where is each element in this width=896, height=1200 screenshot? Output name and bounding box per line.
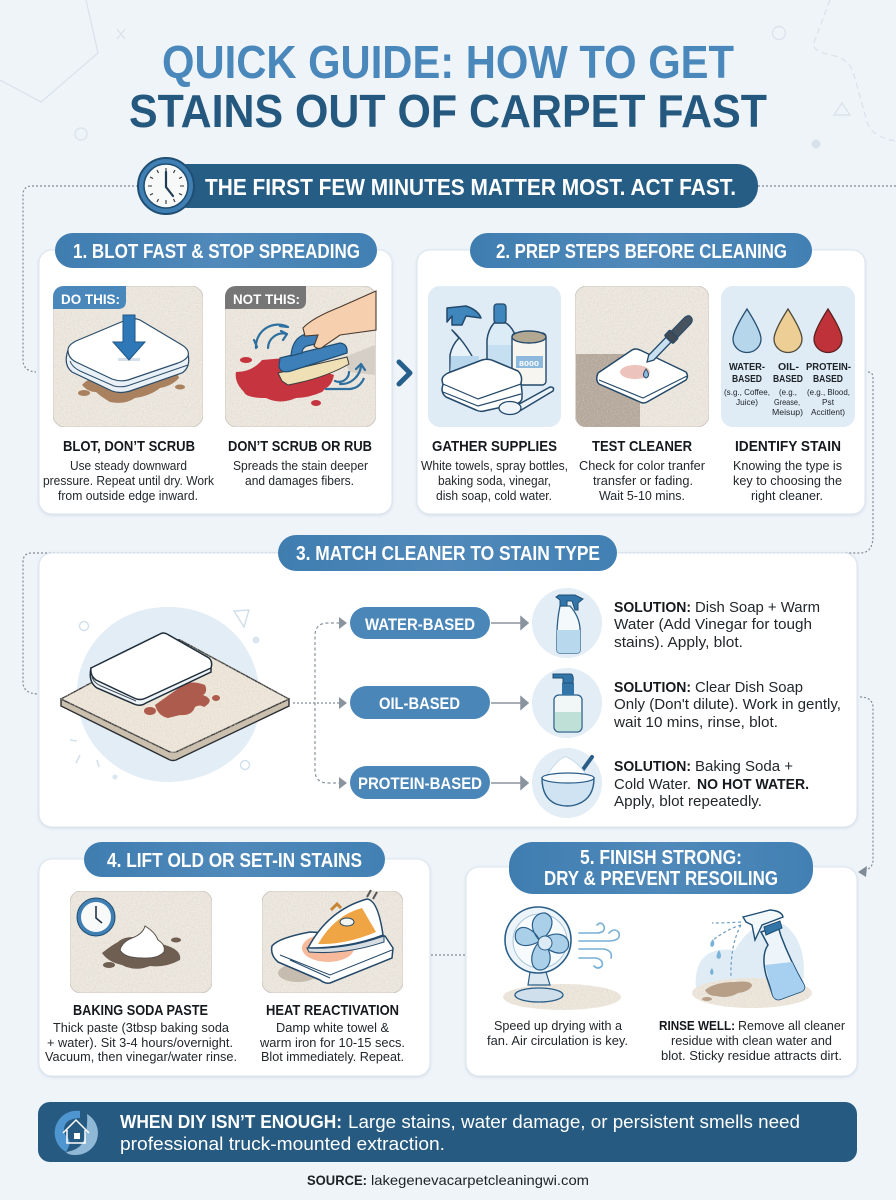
caption: gather supplies: dish soap, cold water. xyxy=(436,488,552,503)
icon: spray bottle xyxy=(532,588,602,658)
caption: heat reactivation: Blot immediately. Repeat. xyxy=(261,1049,404,1064)
illustration: iron heat xyxy=(262,890,403,993)
icon: house in swirl xyxy=(55,1111,98,1155)
solution: protein based xyxy=(614,758,809,810)
heading: step 5: 5. FINISH STRONG: xyxy=(580,847,742,869)
caption: test cleaner: TEST CLEANER xyxy=(592,438,692,455)
solution: oil based: Clear Dish Soap xyxy=(695,679,803,696)
illustration: test cleaner xyxy=(575,286,709,427)
solution: water based: Water (Add Vinegar for tough xyxy=(614,616,812,633)
caption: don't scrub or rub xyxy=(228,438,372,488)
icon: clock xyxy=(138,158,194,214)
heading: step 2 xyxy=(470,233,812,268)
caption: rinse well: RINSE WELL: xyxy=(659,1018,735,1033)
caption: test cleaner: Check for color tranfer xyxy=(579,458,706,473)
label: water based: Juice) xyxy=(736,397,758,407)
illustration: rinse spray bottle xyxy=(692,910,812,1008)
label: oil based xyxy=(772,361,803,417)
caption: gather supplies: baking soda, vinegar, xyxy=(438,473,551,488)
caption: gather supplies: GATHER SUPPLIES xyxy=(432,438,557,455)
heading: step 1 xyxy=(55,233,377,268)
dotted connector: step 3 to step 5 xyxy=(858,697,873,877)
label: protein based: Accitlent) xyxy=(811,407,845,417)
illustration: supplies xyxy=(428,286,561,427)
caption: don't scrub or rub: Spreads the stain deeper xyxy=(233,458,369,473)
label: oil based: OIL- xyxy=(778,361,799,373)
decorative background shapes xyxy=(0,0,896,148)
dotted connector: banner to section 1 xyxy=(23,186,138,372)
illustration: do this, towel blotting stain xyxy=(53,286,203,427)
arrow: chevron between steps 1 and 2 xyxy=(399,362,410,384)
illustration: fan xyxy=(503,907,621,1010)
callout text xyxy=(120,1112,800,1154)
caption: baking soda paste: BAKING SODA PASTE xyxy=(73,1002,208,1019)
callout text: Large stains, water damage, or persistent smells need xyxy=(348,1112,800,1132)
label: protein based: BASED xyxy=(813,373,843,385)
callout text: professional truck-mounted extraction. xyxy=(120,1134,445,1154)
icon: bowl of baking soda xyxy=(532,748,602,818)
solution: oil based xyxy=(613,679,841,731)
panel: step 2 prep xyxy=(417,233,865,514)
caption: gather supplies xyxy=(421,438,568,503)
dotted connector: step 4 to step 5 xyxy=(431,954,466,956)
solution: oil based: Only (Don't dilute). Work in gently, xyxy=(614,696,841,713)
caption: rinse well: blot. Sticky residue attracts dirt. xyxy=(661,1048,842,1063)
connector: carpet to stain types xyxy=(293,617,347,789)
caption: don't scrub or rub: and damages fibers. xyxy=(245,473,354,488)
caption: identify stain: right cleaner. xyxy=(751,488,823,503)
heading: step 1: 1. BLOT FAST & STOP SPREADING xyxy=(73,241,360,263)
caption: rinse well xyxy=(659,1018,846,1063)
caption: blot, don't scrub: Use steady downward xyxy=(70,458,187,473)
label: water based: (s.g., Coffee, xyxy=(724,387,770,397)
urgency banner xyxy=(138,158,758,214)
tab: not this: NOT THIS: xyxy=(233,291,300,307)
solution: water based: Dish Soap + Warm xyxy=(695,599,820,616)
caption: heat reactivation: HEAT REACTIVATION xyxy=(266,1002,399,1019)
caption: identify stain: key to choosing the xyxy=(733,473,842,488)
source line: lakegenevacarpetcleaningwi.com xyxy=(371,1172,589,1188)
caption: baking soda paste: Thick paste (3tbsp baking soda xyxy=(53,1020,230,1035)
title xyxy=(129,36,767,137)
caption: blot, don't scrub: pressure. Repeat until dry. Work xyxy=(43,473,214,488)
title: STAINS OUT OF CARPET FAST xyxy=(129,85,767,137)
icon: oil drop xyxy=(774,309,802,352)
solution: protein based: NO HOT WATER. xyxy=(697,776,809,793)
source line: SOURCE: xyxy=(307,1172,367,1188)
illustration: not this, scrubbing xyxy=(225,286,376,427)
solution: protein based: SOLUTION: xyxy=(614,758,691,775)
heading: step 5 xyxy=(509,842,813,894)
label: protein based: PROTEIN- xyxy=(806,361,851,373)
pill: water based: WATER-BASED xyxy=(365,615,475,634)
caption: identify stain: Knowing the type is xyxy=(733,458,842,473)
caption: test cleaner: Wait 5-10 mins. xyxy=(599,488,685,503)
caption: test cleaner: transfer or fading. xyxy=(593,473,693,488)
heading: step 3 xyxy=(278,535,617,571)
panel: step 4 lift old stains xyxy=(39,842,430,1076)
panel: step 3 match cleaner xyxy=(39,535,857,827)
tab: do this: DO THIS: xyxy=(61,291,120,307)
title: QUICK GUIDE: HOW TO GET xyxy=(162,36,734,88)
tab: do this xyxy=(53,286,126,309)
illustration: supplies: 8000 xyxy=(519,361,539,368)
caption: don't scrub or rub: DON’T SCRUB OR RUB xyxy=(228,438,372,455)
caption: test cleaner xyxy=(579,438,706,503)
label: protein based: Pst xyxy=(822,397,835,407)
caption: gather supplies: White towels, spray bottles, xyxy=(421,458,568,473)
pill: oil based xyxy=(350,686,490,719)
label: oil based: Meisup) xyxy=(772,407,803,417)
panel: step 5 finish strong xyxy=(466,842,857,1076)
solution: water based: stains). Apply, blot. xyxy=(614,634,743,651)
tab: not this xyxy=(225,286,306,309)
arrow: protein to bowl xyxy=(491,777,528,789)
dotted connector: step 2 to step 3 xyxy=(618,372,873,553)
pill: water based xyxy=(350,607,490,639)
solution: water based xyxy=(614,599,820,651)
dotted connector: banner to right edge xyxy=(758,185,896,187)
illustration: baking soda paste xyxy=(70,891,212,993)
label: oil based: Grease, xyxy=(774,397,800,407)
icon: water drop xyxy=(733,309,761,352)
solution: protein based: Baking Soda + xyxy=(695,758,793,775)
caption: heat reactivation xyxy=(259,1002,405,1064)
callout text: WHEN DIY ISN’T ENOUGH: xyxy=(120,1112,342,1132)
caption: fan tip xyxy=(487,1018,628,1048)
caption: heat reactivation: Damp white towel & xyxy=(276,1020,389,1035)
icon: clock xyxy=(77,898,115,936)
illustration: stain type drops xyxy=(721,286,855,427)
callout: when DIY isn't enough xyxy=(38,1102,857,1162)
solution: protein based: Apply, blot repeatedly. xyxy=(614,793,762,810)
banner text: THE FIRST FEW MINUTES MATTER MOST. ACT FAST. xyxy=(205,174,736,200)
caption: blot, don't scrub: from outside edge inward. xyxy=(58,488,198,503)
label: oil based: BASED xyxy=(773,373,803,385)
icon: protein drop xyxy=(814,309,842,352)
caption: rinse well: Remove all cleaner xyxy=(738,1018,846,1033)
caption: baking soda paste: Vacuum, then vinegar/water rinse. xyxy=(45,1049,237,1064)
label: protein based: (e.g., Blood, xyxy=(807,387,850,397)
pill: protein based: PROTEIN-BASED xyxy=(358,774,482,793)
label: water based: BASED xyxy=(732,373,762,385)
heading: step 5: DRY & PREVENT RESOILING xyxy=(544,868,778,890)
caption: blot, don't scrub xyxy=(43,438,214,503)
caption: baking soda paste: + water). Sit 3-4 hours/overnight. xyxy=(47,1035,233,1050)
label: water based: WATER- xyxy=(729,361,765,373)
pill: oil based: OIL-BASED xyxy=(379,694,460,713)
caption: fan tip: fan. Air circulation is key. xyxy=(487,1033,628,1048)
label: protein based xyxy=(806,361,851,417)
label: oil based: (e.g., xyxy=(779,387,797,397)
heading: step 4: 4. LIFT OLD OR SET-IN STAINS xyxy=(107,850,362,872)
caption: heat reactivation: warm iron for 10-15 secs. xyxy=(259,1035,405,1050)
arrow: oil to pump bottle xyxy=(491,697,528,709)
pill: protein based xyxy=(350,766,490,799)
caption: identify stain xyxy=(733,438,842,503)
arrow: water to spray xyxy=(491,617,528,629)
illustration: towel on carpet stain xyxy=(61,607,289,782)
heading: step 2: 2. PREP STEPS BEFORE CLEANING xyxy=(496,241,787,263)
caption: blot, don't scrub: BLOT, DON’T SCRUB xyxy=(63,438,195,455)
solution: oil based: SOLUTION: xyxy=(614,679,691,696)
icon: pump soap bottle xyxy=(532,668,602,738)
caption: identify stain: IDENTIFY STAIN xyxy=(735,438,841,455)
dotted connector: step 3 left loop xyxy=(23,553,279,694)
panel: step 1 blot fast xyxy=(39,233,392,514)
solution: water based: SOLUTION: xyxy=(614,599,691,616)
solution: protein based: Cold Water. xyxy=(614,776,691,793)
heading: step 3: 3. MATCH CLEANER TO STAIN TYPE xyxy=(296,543,600,565)
caption: fan tip: Speed up drying with a xyxy=(494,1018,623,1033)
heading: step 4 xyxy=(84,842,385,877)
solution: oil based: wait 10 mins, rinse, blot. xyxy=(613,714,778,731)
caption: rinse well: residue with clean water and xyxy=(671,1033,832,1048)
label: water based xyxy=(724,361,770,407)
caption: baking soda paste xyxy=(45,1002,237,1064)
